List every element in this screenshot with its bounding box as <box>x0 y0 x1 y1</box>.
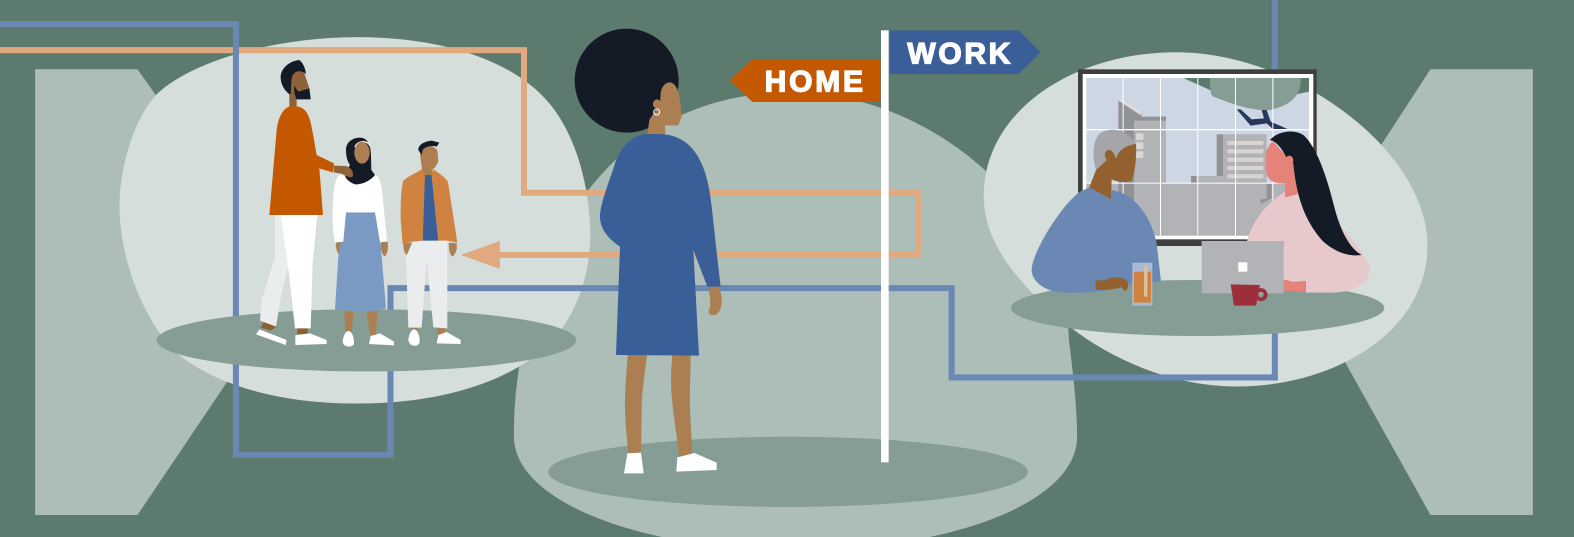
table <box>1011 280 1384 336</box>
tree outside window <box>1183 78 1309 100</box>
window grid <box>1086 78 1309 236</box>
hair <box>575 29 679 133</box>
left pale blob <box>119 37 590 404</box>
central blob <box>514 92 1077 537</box>
tall man <box>256 60 334 345</box>
legs <box>625 355 692 457</box>
woman colleague <box>1247 131 1370 293</box>
young man in jacket <box>401 141 461 346</box>
ground ellipses <box>157 309 1028 507</box>
window <box>1078 69 1317 246</box>
buildings <box>1118 98 1142 183</box>
orange arrow line <box>0 50 919 269</box>
ear <box>653 99 661 109</box>
office scene <box>1011 69 1384 336</box>
man's hand on shoulder <box>334 166 353 177</box>
signpost <box>730 30 1041 462</box>
arrowhead <box>461 241 500 269</box>
glass of juice <box>1132 263 1152 306</box>
family group <box>256 60 461 347</box>
right angular shape <box>1325 69 1533 515</box>
pole <box>881 30 889 462</box>
blue dress <box>600 134 721 356</box>
man colleague <box>1032 130 1161 293</box>
hand <box>708 287 722 315</box>
right pale blob <box>984 52 1427 386</box>
blue route line <box>0 0 1275 455</box>
left angular shape <box>35 69 241 515</box>
face and neck <box>647 82 682 135</box>
home sign: HOME <box>765 66 863 99</box>
work sign: WORK <box>907 37 1011 70</box>
woman in hijab <box>333 138 394 347</box>
work sign <box>890 30 1041 74</box>
shoes <box>624 453 717 473</box>
laptop <box>1202 241 1284 293</box>
home sign <box>730 59 880 102</box>
coffee mug <box>1231 284 1266 306</box>
earring <box>654 109 660 115</box>
central woman with afro <box>575 29 722 473</box>
